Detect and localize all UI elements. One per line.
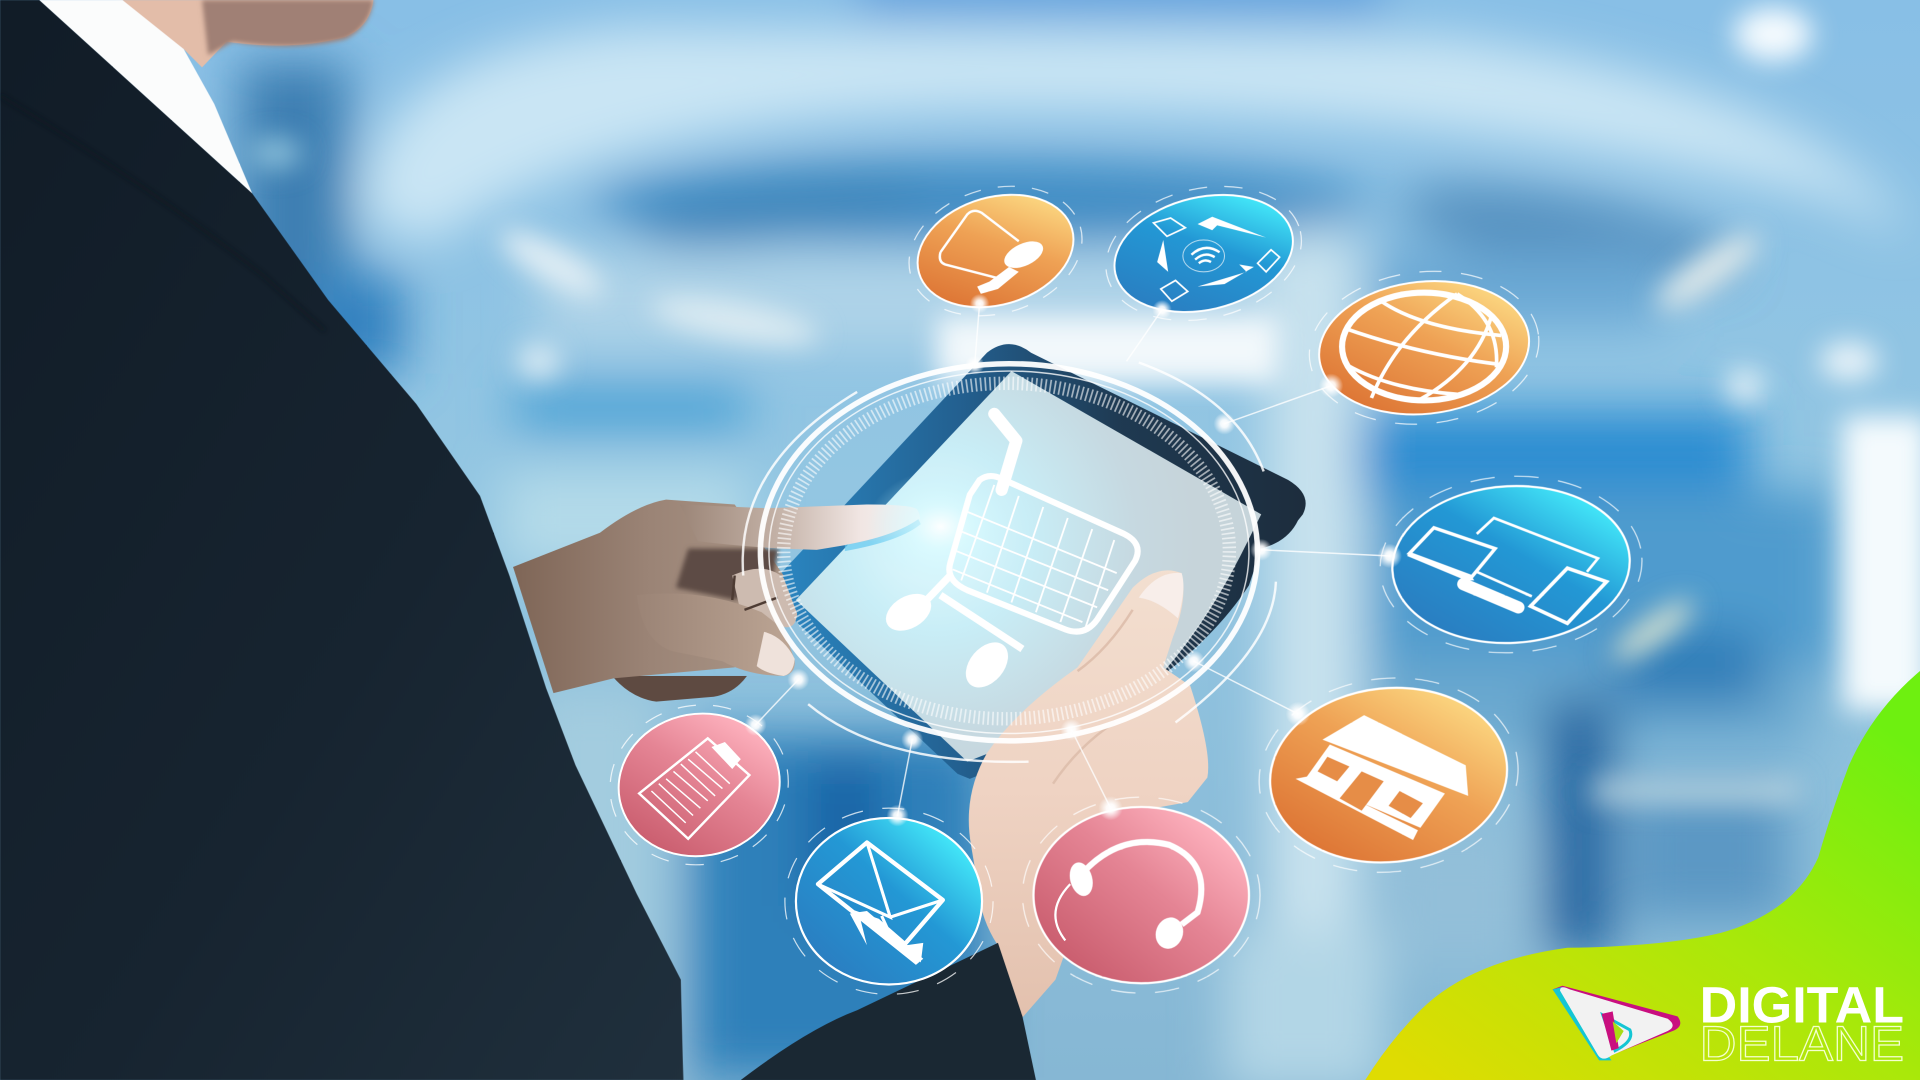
icon: devices badge bbox=[1376, 470, 1646, 659]
index finger bbox=[680, 504, 920, 550]
hand: left hand pointing at tablet bbox=[513, 500, 921, 702]
white shirt collar bbox=[39, 0, 252, 193]
thumb nail bbox=[1139, 573, 1183, 618]
lapel crease bbox=[0, 96, 324, 331]
palm shadow bbox=[676, 549, 779, 600]
icon: mail badge bbox=[785, 808, 993, 994]
icon: storefront badge bbox=[1249, 665, 1528, 885]
corner panel: green wave bbox=[1365, 671, 1920, 1080]
chin shadow bbox=[202, 0, 373, 55]
panel: businessman bbox=[0, 0, 683, 1080]
logo wordmark: DELANE bbox=[1700, 1017, 1904, 1071]
back of hand bbox=[513, 500, 784, 693]
thumb bbox=[637, 593, 795, 676]
hand: right hand holding tablet bbox=[969, 570, 1208, 1019]
icon: headset badge bbox=[1022, 797, 1260, 993]
connector lines bbox=[756, 304, 1390, 816]
icon: globe badge bbox=[1302, 260, 1546, 435]
suit jacket bbox=[0, 0, 683, 1080]
tablet screen bbox=[796, 371, 1261, 762]
lower curled fingers bbox=[612, 676, 747, 702]
finger underside glow bbox=[845, 519, 921, 551]
glow at touch point bbox=[867, 470, 1014, 583]
icon: wifi network badge bbox=[1092, 168, 1315, 339]
neck and chin bbox=[116, 0, 373, 67]
logo wordmark: DIGITAL bbox=[1700, 975, 1904, 1033]
icon: megaphone badge bbox=[894, 167, 1097, 335]
logo: play icon bbox=[1553, 986, 1680, 1060]
finger creases bbox=[732, 576, 778, 610]
suit sleeve, right arm bbox=[741, 943, 1036, 1080]
glowing connection nodes bbox=[744, 294, 1402, 827]
icon: shopping cart bbox=[879, 414, 1138, 696]
curled finger bbox=[732, 569, 797, 627]
thumb nail bbox=[757, 632, 795, 676]
icon: clipboard badge bbox=[597, 691, 801, 879]
holographic rings bbox=[743, 362, 1276, 762]
tablet bbox=[775, 344, 1306, 779]
logo wordmark bbox=[1700, 975, 1904, 1071]
palm crease bbox=[1053, 610, 1133, 784]
